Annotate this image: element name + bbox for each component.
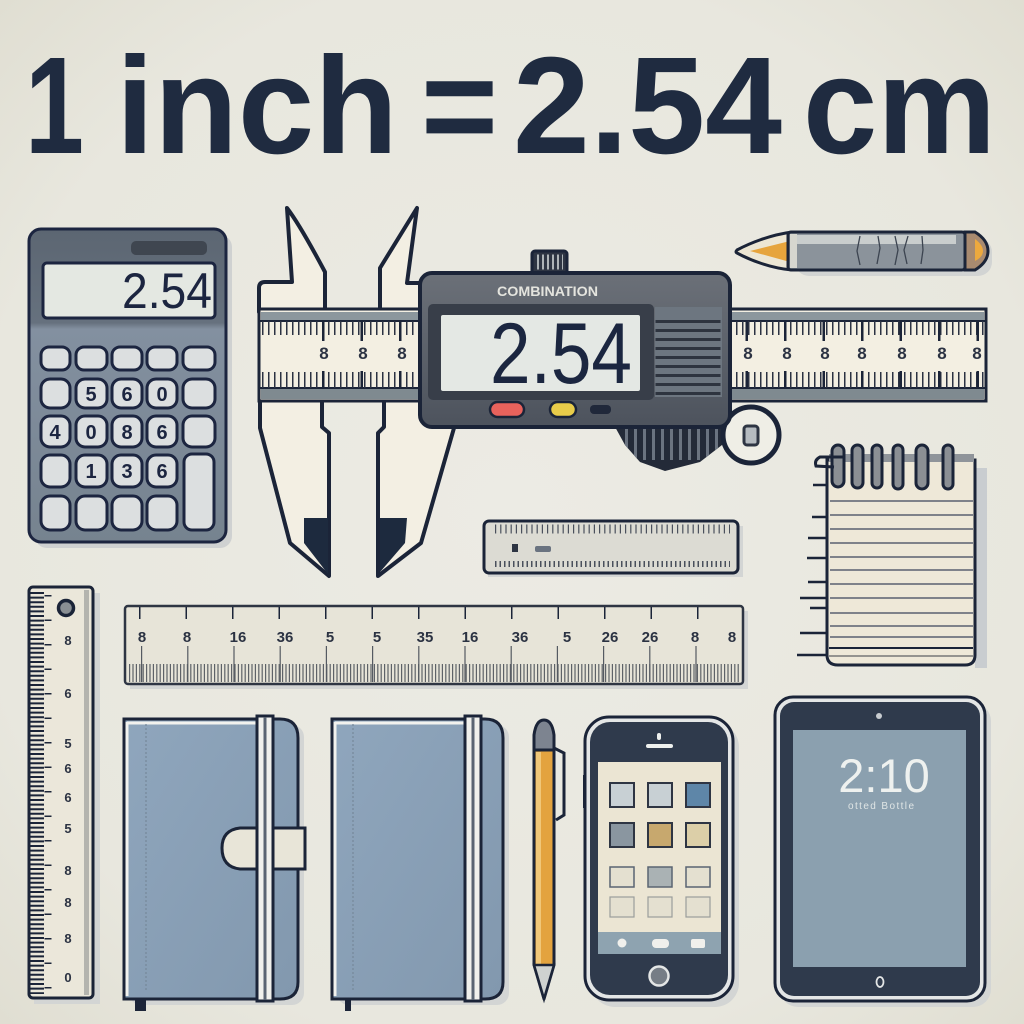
icon: calculator: 0 xyxy=(156,384,168,406)
icon: spiral notepad xyxy=(797,445,987,668)
icon: vertical ruler: 6 xyxy=(64,790,72,805)
icon: long ruler: 35 xyxy=(417,629,433,646)
caliper beam: 8 xyxy=(820,344,830,363)
caliper beam: 8 xyxy=(937,344,947,363)
phone app icons xyxy=(610,783,710,948)
icon: vertical ruler: 6 xyxy=(64,686,72,701)
icon: vertical ruler: 0 xyxy=(64,970,72,985)
icon: calculator: 3 xyxy=(121,461,133,483)
icon: calculator: 8 xyxy=(121,422,133,444)
caliper beam: 8 xyxy=(857,344,867,363)
icon: calculator: 6 xyxy=(156,422,168,444)
icon: calculator: 5 xyxy=(85,384,97,406)
icon: pencil xyxy=(736,232,992,276)
icon: vertical ruler: 6 xyxy=(64,761,72,776)
caliper jaw tips xyxy=(304,518,328,574)
icon: calculator: 2.54 xyxy=(122,263,212,319)
icon: notebook xyxy=(332,716,509,1011)
caliper upper jaws xyxy=(259,208,421,312)
caliper beam: 8 xyxy=(397,344,407,363)
icon: long ruler: 16 xyxy=(462,629,478,646)
icon: digital caliper xyxy=(259,208,986,576)
caliper beam: 8 xyxy=(319,344,329,363)
caliper thumb knob xyxy=(532,251,567,274)
icon: long ruler: 26 xyxy=(602,629,618,646)
icon: vertical ruler: 8 xyxy=(64,895,72,910)
icon: long ruler: 5 xyxy=(563,629,571,646)
icon: vertical ruler: 5 xyxy=(64,821,72,836)
icon: vertical ruler: 5 xyxy=(64,736,72,751)
icon: vertical ruler: 8 xyxy=(64,931,72,946)
icon: long ruler: 8 xyxy=(691,629,699,646)
title: 1 xyxy=(25,29,84,183)
title: cm xyxy=(803,29,996,183)
caliper display body xyxy=(420,273,730,427)
caliper beam: 8 xyxy=(743,344,753,363)
tablet clock time: 2:10 xyxy=(838,749,930,802)
icon: calculator: 1 xyxy=(85,461,97,483)
icon: smartphone xyxy=(583,717,739,1007)
caliper beam: 8 xyxy=(897,344,907,363)
icon: calculator xyxy=(29,229,232,548)
caliper small dial xyxy=(723,407,779,463)
icon: long ruler: 16 xyxy=(230,629,246,646)
icon: long ruler: 8 xyxy=(728,629,736,646)
title xyxy=(25,29,996,183)
icon: calculator: 0 xyxy=(85,422,97,444)
notebook clasp xyxy=(222,828,305,869)
icon: calculator: 4 xyxy=(49,422,61,444)
caliper thumb wheel xyxy=(614,425,722,471)
icon: small ruler xyxy=(484,521,743,577)
caliper beam: 8 xyxy=(972,344,982,363)
notebook strap xyxy=(465,716,481,1001)
icon: tablet xyxy=(775,697,991,1007)
caliper lower jaws xyxy=(260,396,454,576)
tablet date text: otted Bottle xyxy=(848,801,914,812)
icon: vertical pencil xyxy=(534,720,564,999)
icon: vertical ruler: 8 xyxy=(64,633,72,648)
icon: long ruler: 36 xyxy=(277,629,293,646)
caliper jaw tip right xyxy=(380,518,407,572)
icon: notebook with clasp xyxy=(124,716,305,1011)
icon: calculator: 6 xyxy=(156,461,168,483)
icon: long ruler: 8 xyxy=(183,629,191,646)
icon: long ruler: 5 xyxy=(373,629,381,646)
title: 2.54 xyxy=(513,29,782,183)
icon: long ruler: 26 xyxy=(642,629,658,646)
caliper beam: 8 xyxy=(358,344,368,363)
title: = xyxy=(421,29,498,183)
icon: long ruler xyxy=(125,606,748,689)
icon: long ruler: 5 xyxy=(326,629,334,646)
caliper beam xyxy=(259,309,986,401)
icon: long ruler: 8 xyxy=(138,629,146,646)
icon: calculator: 6 xyxy=(121,384,133,406)
caliper display body: COMBINATION xyxy=(497,283,598,299)
icon: vertical ruler: 8 xyxy=(64,863,72,878)
caliper beam: 8 xyxy=(782,344,792,363)
caliper display body: 2.54 xyxy=(490,306,632,402)
title: inch xyxy=(116,29,398,183)
notebook strap xyxy=(257,716,273,1001)
icon: vertical ruler xyxy=(29,587,100,1004)
notepad spiral rings xyxy=(832,445,953,489)
icon: long ruler: 36 xyxy=(512,629,528,646)
